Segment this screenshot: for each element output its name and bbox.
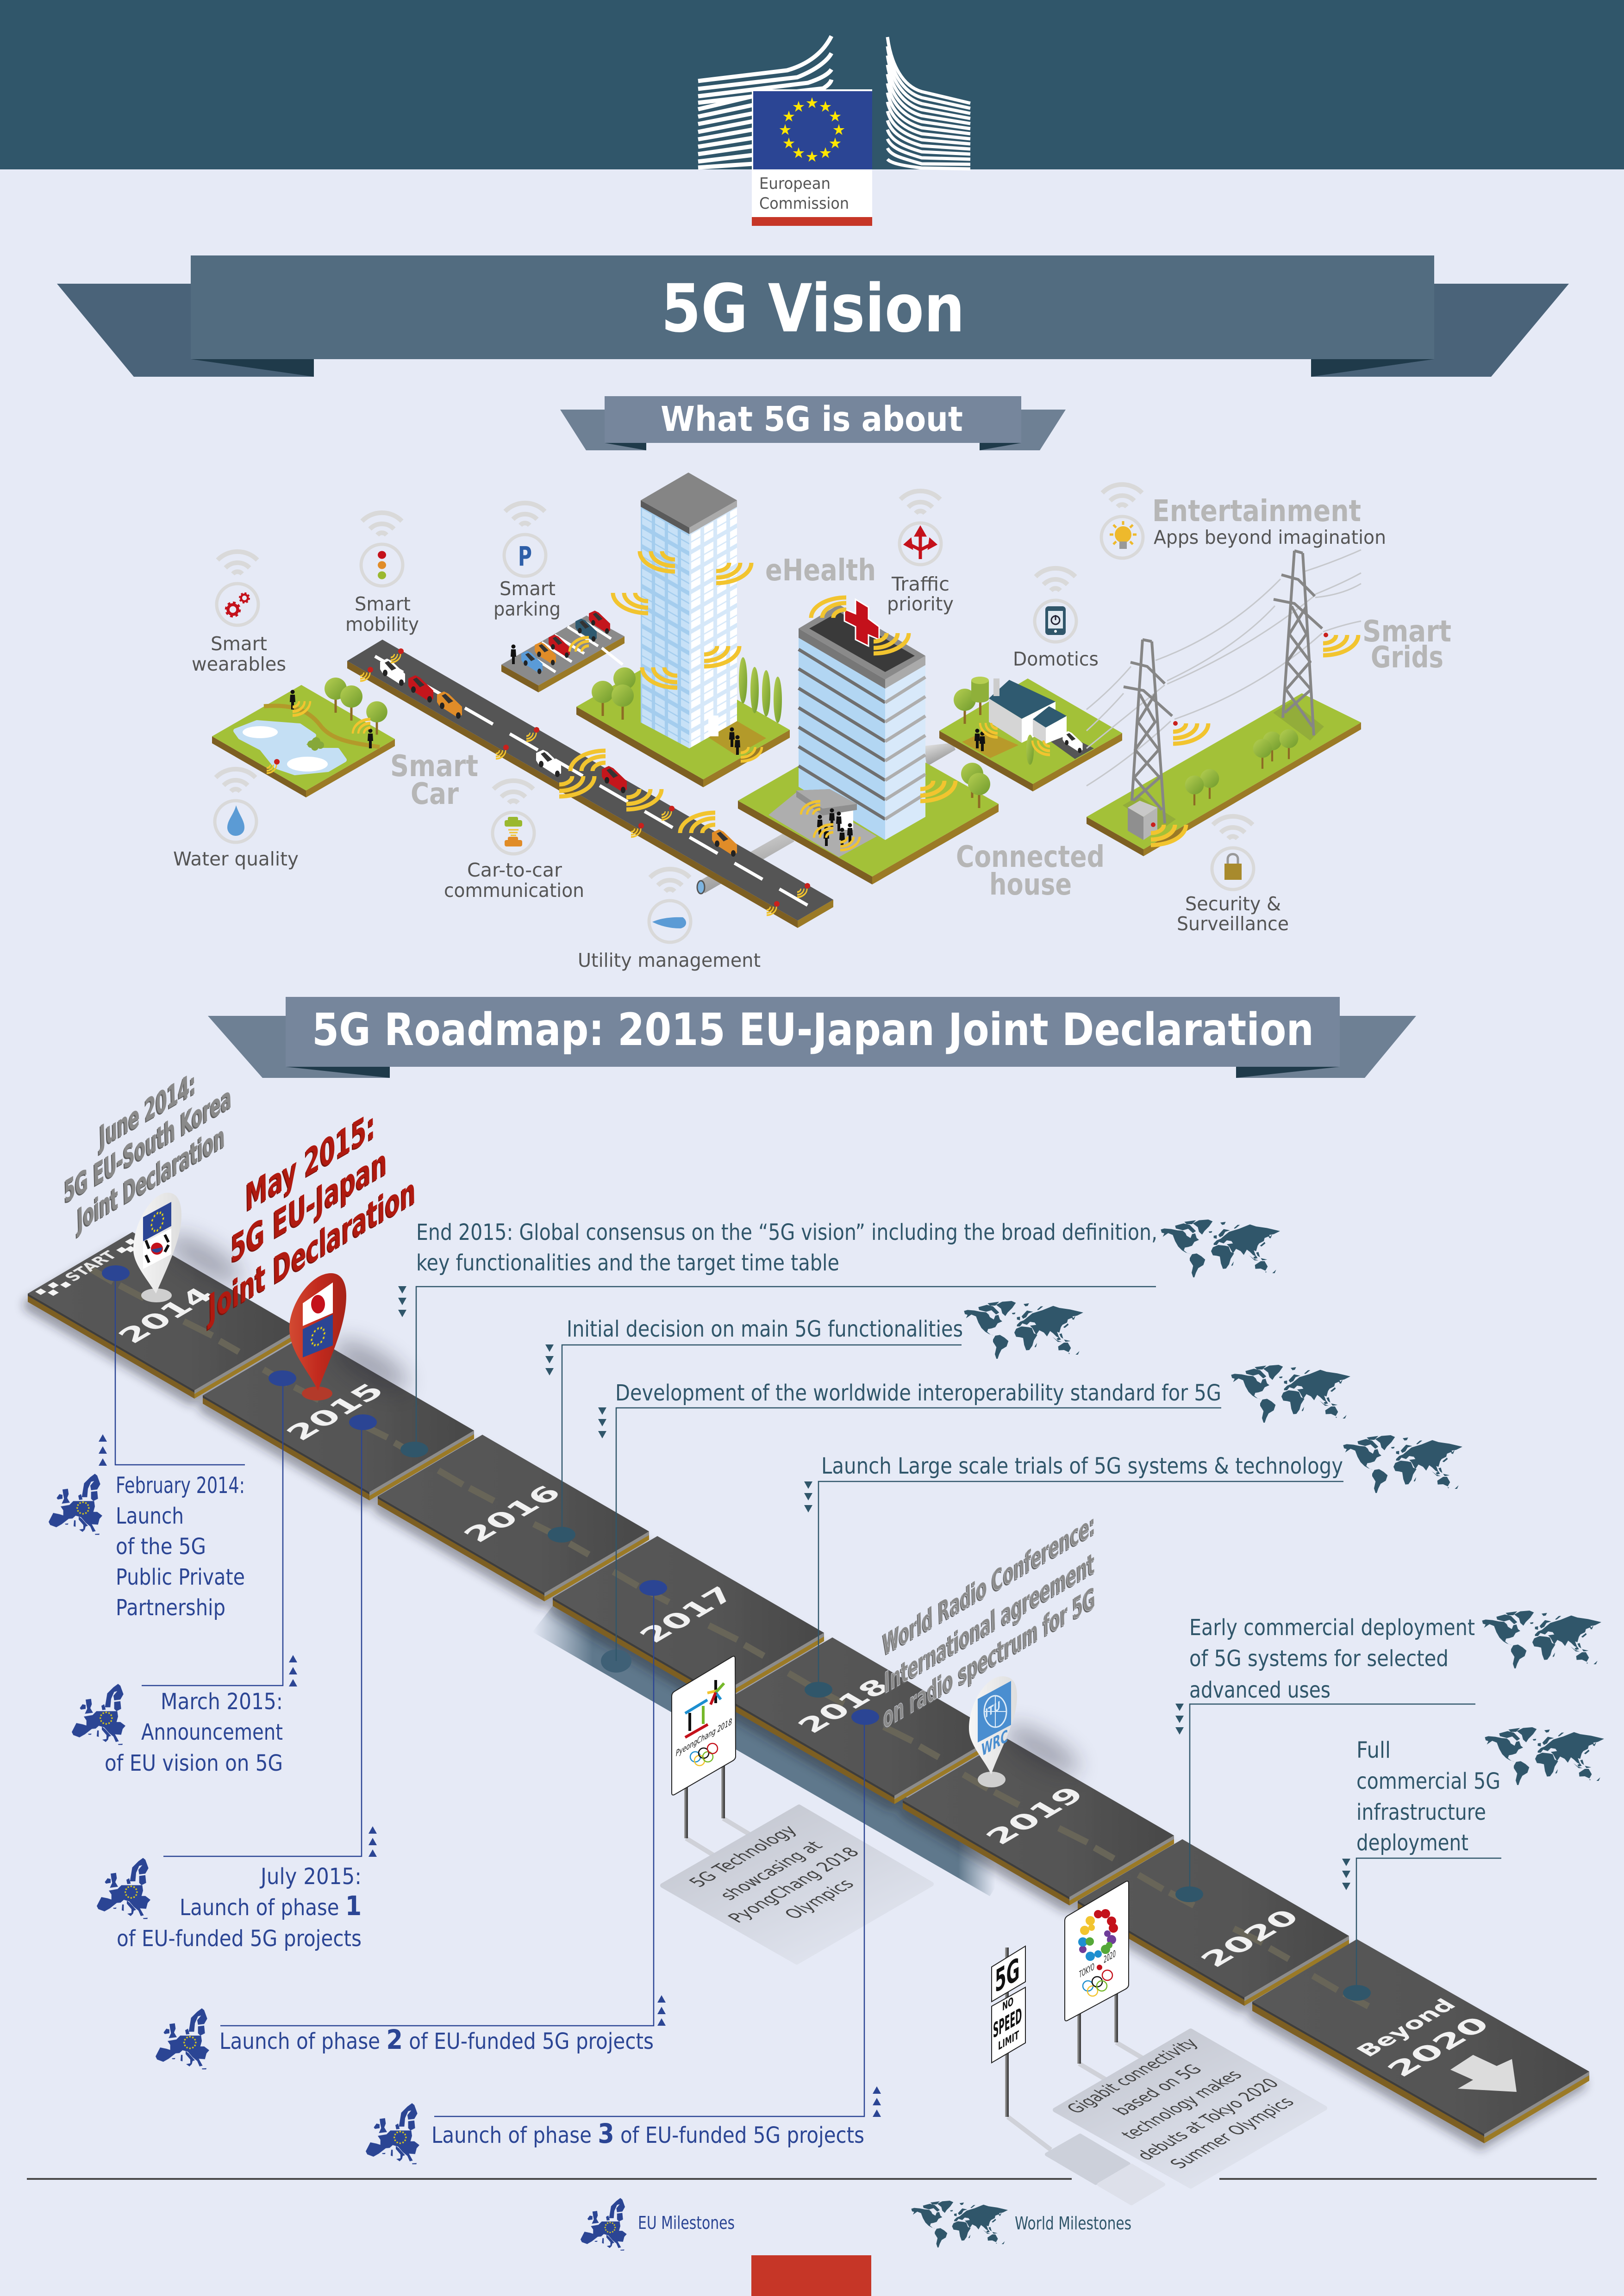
underground pipe [697,743,956,894]
pin: South Korea [133,1193,181,1302]
text: May 2015 EU-Japan declaration: 5G EU-Japan [228,1141,389,1271]
title ribbon: 5G Vision [57,255,1569,377]
label: Smart wearables [192,552,286,675]
icon: gears [226,593,249,616]
world milestone: End 2015 [398,1220,1280,1457]
label: Traffic priority: priority [887,593,954,615]
callout: Tokyo plate and 5G shadows: Gigabit connectivity [1062,2035,1203,2116]
label: Utility management [578,869,761,971]
pylon 2 [1274,551,1322,735]
EU milestone: February 2014: Public Private [116,1564,245,1590]
world milestone: End 2015: key functionalities and the target time table [416,1250,839,1276]
world milestone: Early commercial deployment: of 5G systems for selected [1189,1646,1449,1672]
panel: smart grid island [1087,550,1361,856]
text: May 2015 EU-Japan declaration: Joint Declaration [202,1170,418,1332]
sign: 5G no speed limit: 5G [995,1950,1020,2000]
world milestone: Full commercial deployment: infrastructure [1356,1799,1486,1825]
label: Connected house: Connected [956,840,1105,874]
label: Smart Grids [1362,615,1451,675]
logo text: Commission [759,194,849,213]
label: Domotics [1013,568,1099,670]
label: Utility management: Utility management [578,949,761,971]
logo: European Commission [698,36,970,226]
icon: tablet power button [1045,606,1066,635]
icon: traffic arrows [906,529,935,559]
year labels on road: 2019 [978,1782,1092,1849]
legend: World Milestones [911,2201,1131,2247]
sign: Tokyo 2020: TOKYO [1079,1960,1094,1980]
EU milestone: February 2014: February 2014: [116,1473,245,1499]
label: Smart mobility [345,513,419,635]
text: May 2015 EU-Japan declaration: May 2015: [243,1104,378,1219]
EU milestone: February 2014 [49,1265,245,1621]
sign: Tokyo 2020: 2020 [1104,1948,1116,1966]
label: Entertainment: Apps beyond imagination [1154,526,1386,548]
pin: WRC [969,1676,1017,1787]
label: Smart Grids: Grids [1371,641,1443,675]
icon: red cross [844,599,879,646]
label: Traffic priority: Traffic [891,573,949,595]
label: Domotics: Domotics [1013,648,1099,670]
soft pin shadows [161,1226,1085,1782]
label: Entertainment: Entertainment [1152,494,1361,529]
icon: traffic light [378,551,386,579]
year labels on road: 2017 [632,1582,743,1648]
label: Smart Car: Smart [390,749,478,784]
label: Security & Surveillance: Security & [1185,893,1281,915]
callout: PyeongChang plate: 5G Technology [685,1823,802,1890]
sign: PyeongChang 2018: PyeongChang 2018 [676,1717,732,1759]
substation box [1128,801,1157,840]
label: eHealth: eHealth [765,554,876,588]
pin: WRC: WRC [981,1726,1008,1761]
label: Smart parking: Smart [500,578,556,600]
text: World Radio Conference [881,1507,1098,1735]
house [989,678,1067,744]
EU milestone: March 2015: Announcement [141,1719,283,1745]
road shadow band [532,1606,1018,1896]
world milestone: Initial decision: Initial decision on main 5G functionalities [567,1316,963,1342]
world milestone: End 2015: End 2015: Global consensus on the “5G vision” including the broad definition, [416,1220,1157,1245]
pond [236,722,344,773]
panel: parking lot [501,610,625,692]
icon: water drop [227,805,244,836]
label: Smart wearables: wearables [192,653,286,675]
road segment: beyond 2020 [1252,1939,1589,2143]
legend: World Milestones: World Milestones [1015,2213,1131,2234]
world milestone: Large scale trials [804,1435,1462,1698]
world milestone: Full commercial deployment: deployment [1356,1830,1468,1856]
pin: Japan [289,1273,346,1400]
label: Smart mobility: mobility [345,613,419,635]
callout: PyeongChang plate: PyongChang 2018 [724,1844,864,1926]
year labels on road: 2016 [456,1481,569,1547]
footer red block [751,2255,871,2296]
world milestone: Early commercial deployment: Early commercial deployment [1189,1615,1475,1641]
label: Smart Grids: Smart [1362,615,1451,649]
heading: 5G Vision [661,270,965,347]
icon: light bulb [1110,521,1137,549]
EU milestone: phase 2: Launch of phase 2 of EU-funded 5G projects [219,2024,654,2055]
panel: eHealth tower island [576,473,790,787]
power lines [1087,550,1361,786]
world milestone: Development of standard [598,1365,1350,1673]
text: May 2015 EU-Japan declaration [202,1104,418,1332]
text: June 2014 South Korea declaration: June 2014: [95,1066,198,1156]
world milestone: Full commercial deployment [1342,1727,1604,2001]
label: Water quality [173,769,299,870]
EU milestone: February 2014: Launch [116,1503,184,1529]
label: Car-to-car communication [444,781,584,902]
world milestone: Development of standard: Development of the worldwide interoperability standard for 5G [615,1380,1221,1406]
EU milestone: July 2015 phase 1 [97,1414,377,1952]
label: Traffic priority [887,491,954,615]
label: Connected house [956,840,1105,902]
EU milestone: phase 3 [366,1709,881,2164]
panel: pond island [212,678,395,797]
icon: two cars [505,817,522,846]
sign: PyeongChang 2018 [672,1656,736,1838]
tower building [641,473,737,748]
label: Smart mobility: Smart [355,593,411,615]
text: World Radio Conference: on radio spectrum for 5G [881,1581,1098,1735]
year labels on road: 2020 [1193,1905,1307,1972]
text: World Radio Conference: International agreement [882,1547,1097,1699]
callout: PyeongChang plate [662,1807,931,1962]
year labels on road: 2015 [279,1379,392,1445]
legend: EU Milestones [581,2198,735,2251]
section ribbon: 5G Roadmap [208,997,1416,1078]
label: Security & Surveillance: Surveillance [1177,913,1289,935]
sign: Tokyo 2020 [1065,1881,1129,2064]
EU milestone: March 2015 [72,1370,297,1776]
label: Smart parking: parking [493,598,561,620]
heading: 5G Roadmap: 2015 EU-Japan Joint Declaration [312,1004,1314,1056]
EU milestone: March 2015: of EU vision on 5G [105,1750,283,1776]
sign: 5G no speed limit [992,1946,1025,2117]
legend: EU Milestones: EU Milestones [638,2213,735,2233]
START marker [35,1238,136,1296]
text: June 2014 South Korea declaration: 5G EU-South Korea [62,1081,233,1209]
callout: Tokyo plate and 5G shadows: debuts at Tokyo 2020 [1132,2076,1284,2163]
roadmap road segments [28,1232,1589,2143]
year labels on road: 2018 [790,1674,898,1738]
world milestone: Early commercial deployment: advanced uses [1189,1677,1330,1703]
panel: hospital island [738,597,999,884]
label: Smart wearables: Smart [211,633,267,655]
text: June 2014 South Korea declaration [62,1066,233,1238]
hospital building [799,604,925,840]
label: Car-to-car communication: communication [444,879,584,902]
callout: Tokyo plate and 5G shadows: Summer Olympics [1166,2094,1299,2172]
label: Entertainment [1101,485,1386,558]
year labels on road: 2014 [111,1283,221,1348]
callout: PyeongChang plate: Olympics [780,1876,859,1922]
logo text: European [759,174,831,193]
EU milestone: July 2015 phase 1: of EU-funded 5G projects [117,1926,362,1952]
callout: Tokyo plate and 5G shadows [1008,2031,1325,2203]
panel: connected road with cars [347,640,833,928]
text: June 2014 South Korea declaration: Joint Declaration [73,1120,227,1238]
heading: What 5G is about [661,399,963,439]
world milestone: Full commercial deployment: Full [1356,1737,1391,1763]
pylon 1 [1124,640,1172,823]
world milestone: Large scale trials: Launch Large scale trials of 5G systems & technology [821,1453,1343,1479]
START marker: START [61,1249,121,1284]
icon: water patch [652,917,686,928]
icon: Berlaymont building right wing [887,37,970,169]
EU milestone: March 2015: March 2015: [161,1689,283,1715]
label: Connected house: house [989,868,1072,902]
arrow: beyond [1450,2055,1517,2092]
EU milestone: July 2015 phase 1: Launch of phase 1 [180,1890,362,1922]
header band [0,0,1624,169]
label: Smart parking [493,503,561,620]
label: Smart Car [390,749,478,811]
icon: padlock [1224,854,1242,880]
callout: Tokyo plate and 5G shadows: based on 5G [1109,2061,1207,2118]
label: Smart Car: Car [411,777,459,811]
EU milestone: February 2014: of the 5G [116,1534,206,1560]
cylinder tree [971,677,989,715]
sign: 5G no speed limit: NO [1002,1994,1013,2014]
icon: parking P: P [518,541,532,572]
callout: PyeongChang plate: showcasing at [715,1838,827,1903]
EU milestone: phase 3: Launch of phase 3 of EU-funded 5G projects [431,2118,864,2149]
pin: WRC: ITU [985,1699,1000,1721]
logo text [759,174,849,213]
year labels on road: Beyond [1351,1995,1462,2060]
EU milestone: February 2014: Partnership [116,1595,225,1621]
world milestone: Full commercial deployment: commercial 5G [1356,1768,1500,1794]
panel: connected house island [939,677,1122,791]
section ribbon: What 5G is about [560,396,1066,450]
EU milestone: July 2015 phase 1: July 2015: [259,1864,362,1890]
callout: Tokyo plate and 5G shadows: technology makes [1117,2067,1247,2142]
EU milestone: phase 2 [156,1580,667,2069]
footer rule [27,2178,1597,2180]
world milestone: Early commercial deployment [1175,1611,1601,1902]
sign: 5G no speed limit: LIMIT [998,2028,1019,2053]
year labels on road [111,1283,1498,2082]
EU flag [753,91,872,169]
year labels on road: 2020 [1380,2012,1498,2082]
label: Water quality: Water quality [173,848,299,870]
text: World Radio Conference: World Radio Conference: [881,1507,1098,1661]
icon: Berlaymont building left wing [698,36,831,168]
label: Security & Surveillance [1177,816,1289,935]
sign: 5G no speed limit: SPEED [993,2003,1022,2043]
label: Car-to-car communication: Car-to-car [467,859,562,881]
world milestone: Initial decision [545,1301,1083,1543]
Tokyo wreath [1078,1909,1118,1961]
